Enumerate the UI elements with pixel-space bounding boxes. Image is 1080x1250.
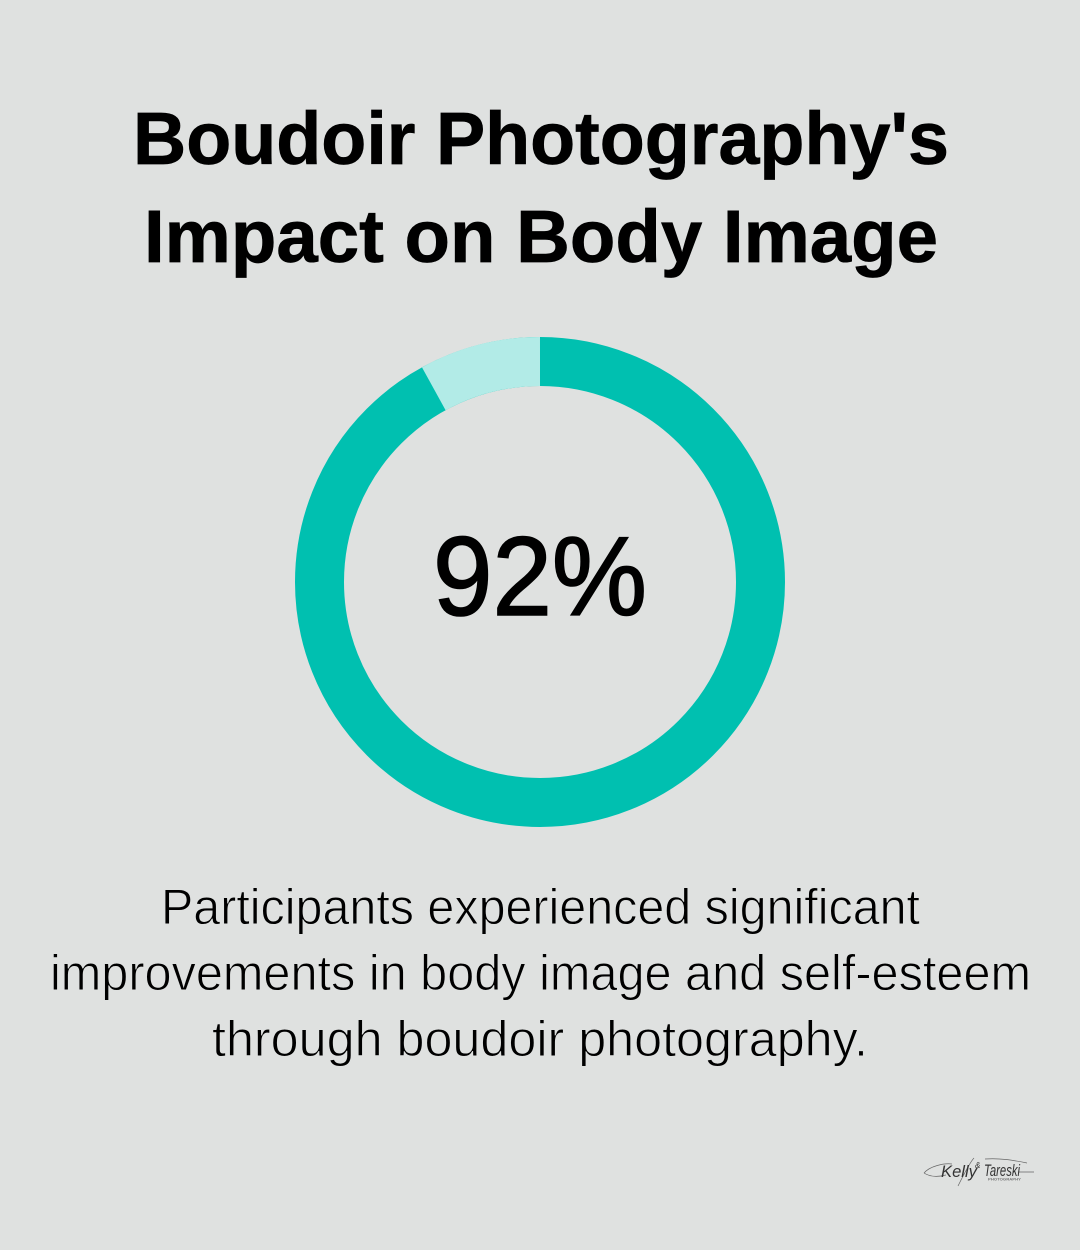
logo signature: & <box>975 1161 980 1170</box>
big number: 92% <box>433 514 647 639</box>
description text: Participants experienced significant <box>161 879 920 935</box>
logo signature: Tareski <box>984 1161 1021 1180</box>
description text <box>50 879 1031 1067</box>
description text: improvements in body image and self-esteem <box>50 945 1031 1001</box>
logo signature <box>924 1158 1034 1186</box>
title: Boudoir Photography's <box>133 97 949 180</box>
donut chart: 92% <box>320 362 760 802</box>
description text: through boudoir photography. <box>212 1011 868 1067</box>
title <box>133 97 949 278</box>
remaining 8% segment <box>434 362 540 389</box>
logo signature: PHOTOGRAPHY <box>988 1178 1022 1182</box>
title: Impact on Body Image <box>144 195 938 278</box>
logo signature: Kelly <box>941 1162 978 1181</box>
